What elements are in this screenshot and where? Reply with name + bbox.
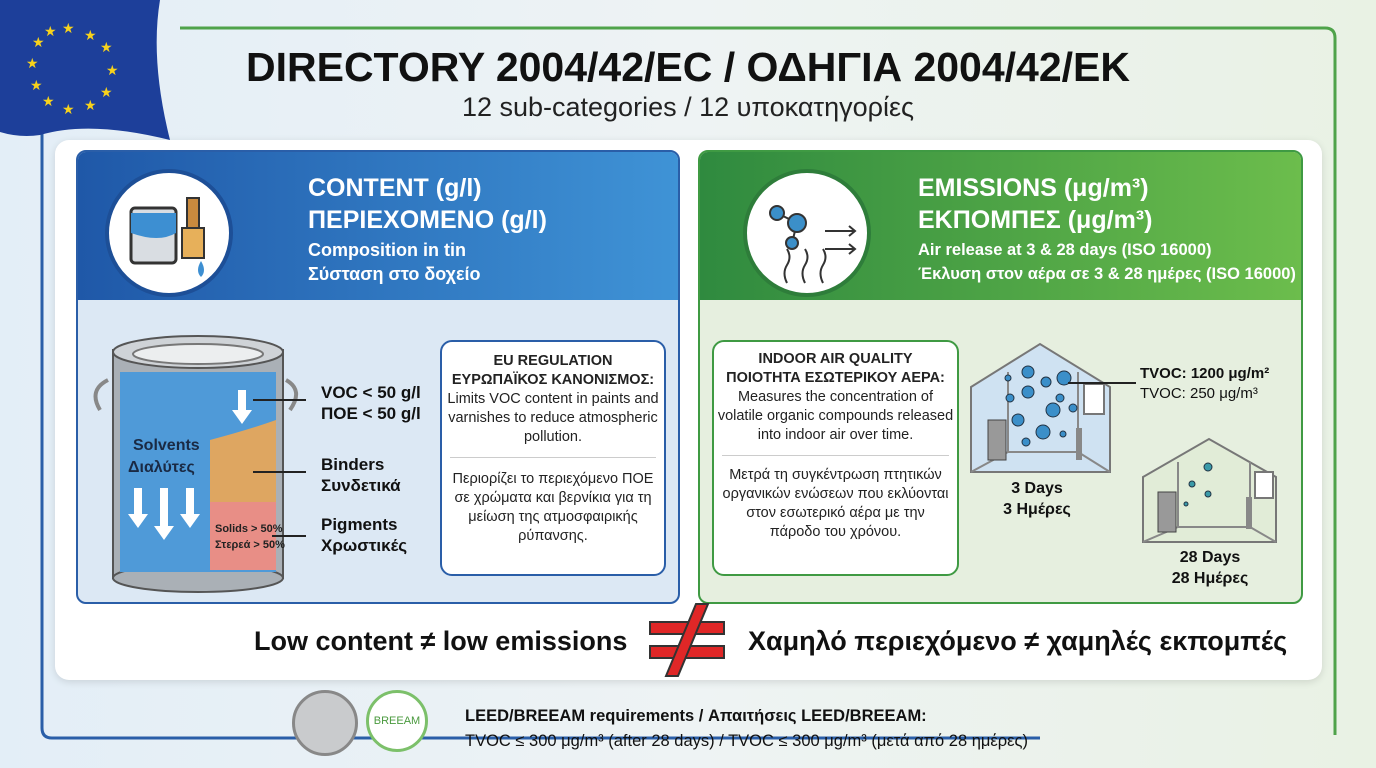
text: low content english: Low content ≠ low emissions — [254, 626, 627, 656]
icon: molecules — [743, 169, 871, 297]
heading: CONTENT (g/l) — [308, 174, 482, 202]
footer text — [465, 707, 1028, 750]
label: pigments — [321, 515, 407, 555]
icon: EU flag: ★ — [44, 23, 57, 39]
callout: EU regulation: Limits VOC content in paints and varnishes to reduce atmospheric pollution. — [447, 391, 659, 445]
callout: EU regulation: Περιορίζει το περιεχόμενο ΠΟΕ σε χρώματα και βερνίκια για τη μείωση της ατμοσφαιρικής ρύπανσης. — [453, 471, 653, 544]
footer text: LEED/BREEAM requirements / Απαιτήσεις LEED/BREEAM: — [465, 707, 927, 725]
heading — [308, 174, 547, 234]
footer text: TVOC ≤ 300 μg/m³ (after 28 days) / TVOC ≤ 300 μg/m³ (μετά από 28 ημέρες) — [465, 732, 1028, 750]
label: 28 days: 28 Days — [1180, 549, 1240, 566]
icon: EU flag: ★ — [42, 93, 55, 109]
callout: indoor air quality: ΠΟΙΟΤΗΤΑ ΕΣΩΤΕΡΙΚΟΥ ΑΕΡΑ: — [726, 370, 945, 386]
chart: rooms 3 and 28 days — [970, 343, 1277, 543]
subheading: Air release at 3 & 28 days (ISO 16000) — [918, 241, 1212, 259]
callout: EU regulation: ΕΥΡΩΠΑΪΚΟΣ ΚΑΝΟΝΙΣΜΟΣ: — [452, 372, 654, 388]
label: VOC: VOC < 50 g/l — [321, 383, 421, 402]
label: binders: Συνδετικά — [321, 476, 401, 495]
callout: EU regulation — [440, 340, 666, 576]
icon: EU flag — [0, 0, 170, 140]
subheading — [918, 241, 1296, 283]
panel: emissions — [698, 150, 1303, 604]
heading: EMISSIONS (μg/m³) — [918, 174, 1149, 202]
callout: EU regulation: EU REGULATION — [494, 353, 612, 369]
subheading — [308, 240, 481, 284]
label: VOC: ΠΟΕ < 50 g/l — [321, 404, 421, 423]
header — [78, 152, 678, 300]
icon: EU flag: ★ — [106, 62, 119, 78]
label: 3 days — [1003, 480, 1071, 518]
heading: ΠΕΡΙΕΧΟΜΕΝΟ (g/l) — [308, 206, 547, 234]
icon: BREEAM logo: BREEAM — [374, 715, 420, 727]
subtitle: 12 sub-categories / 12 υποκατηγορίες — [462, 92, 914, 122]
label: 3 days: 3 Days — [1011, 480, 1063, 497]
label: TVOC — [1140, 365, 1269, 402]
chart: paint can composition: Στερεά > 50% — [215, 539, 285, 551]
icon: paint can and brush — [105, 169, 233, 297]
callout: indoor air quality — [712, 340, 959, 576]
label: 3 days: 3 Ημέρες — [1003, 501, 1071, 518]
label: 28 days — [1172, 549, 1248, 587]
icon: BREEAM logo — [366, 690, 428, 752]
label: VOC — [321, 383, 421, 423]
subheading: Σύσταση στο δοχείο — [308, 264, 481, 284]
text: low content greek: Χαμηλό περιεχόμενο ≠ χαμηλές εκπομπές — [748, 626, 1287, 656]
heading — [918, 174, 1152, 234]
chart: paint can composition: Solvents — [133, 437, 200, 454]
icon: EU flag: ★ — [32, 34, 45, 50]
icon: EU flag: ★ — [100, 39, 113, 55]
icon: EU flag: ★ — [100, 84, 113, 100]
callout: indoor air quality: Measures the concentration of volatile organic compounds released into indoor air over time. — [718, 389, 953, 443]
icon: EU flag: ★ — [62, 20, 75, 36]
label: TVOC: TVOC: 1200 μg/m² — [1140, 365, 1269, 382]
heading: ΕΚΠΟΜΠΕΣ (μg/m³) — [918, 206, 1152, 234]
callout: indoor air quality: Μετρά τη συγκέντρωση πτητικών οργανικών ενώσεων που εκλύονται στον εσωτερικό αέρα με την πάροδο του χρόνου. — [723, 467, 948, 540]
subheading: Έκλυση στον αέρα σε 3 & 28 ημέρες (ISO 16000) — [918, 265, 1296, 283]
label: pigments: Pigments — [321, 515, 398, 534]
icon: EU flag: ★ — [30, 77, 43, 93]
label: TVOC: TVOC: 250 μg/m³ — [1140, 385, 1258, 402]
panel: content — [76, 150, 680, 604]
label: binders — [321, 455, 401, 495]
main card — [55, 140, 1322, 680]
callout: indoor air quality: INDOOR AIR QUALITY — [758, 351, 913, 367]
label: binders: Binders — [321, 455, 384, 474]
icon: EU flag: ★ — [84, 97, 97, 113]
header — [700, 152, 1301, 300]
subheading: Composition in tin — [308, 240, 466, 260]
icon: LEED logo — [292, 690, 358, 756]
label: 28 days: 28 Ημέρες — [1172, 570, 1248, 587]
chart: paint can composition: Διαλύτες — [128, 459, 195, 476]
chart: paint can composition — [94, 335, 306, 593]
icon: EU flag: ★ — [26, 55, 39, 71]
icon: EU flag: ★ — [84, 27, 97, 43]
icon: not equal sign — [649, 603, 725, 677]
label: pigments: Χρωστικές — [321, 536, 407, 555]
icon: EU flag: ★ — [62, 101, 75, 117]
chart: paint can composition: Solids > 50% — [215, 523, 283, 535]
title: DIRECTORY 2004/42/EC / ΟΔΗΓΙΑ 2004/42/ΕΚ — [246, 44, 1130, 90]
